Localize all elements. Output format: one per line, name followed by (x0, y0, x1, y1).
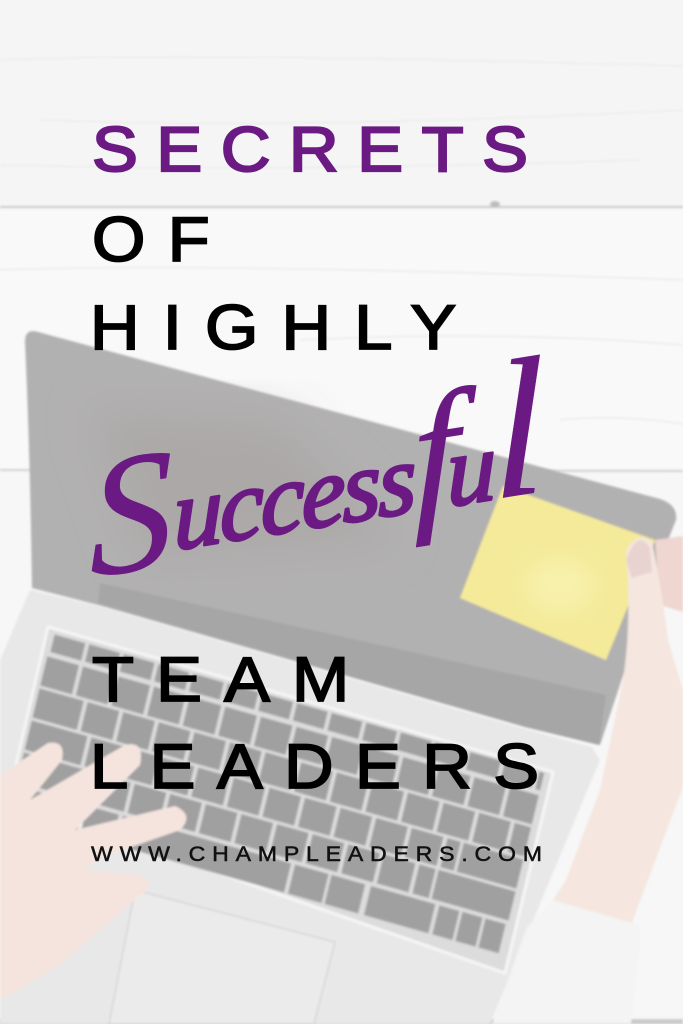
lid reflection (90, 410, 400, 560)
laptop lid (25, 331, 676, 745)
keyboard well (8, 627, 553, 973)
keyboard keys (12, 643, 542, 939)
heading: TEAM: TEAM (92, 644, 349, 714)
script word: Successful: S (88, 411, 175, 614)
script word: Successful: ucces (172, 427, 380, 572)
sticky note (460, 486, 655, 660)
hinge band (98, 583, 606, 745)
script word: Successful (87, 316, 547, 614)
laptop base (0, 590, 600, 1024)
left hand (0, 743, 186, 1000)
heading: LEADERS: LEADERS (90, 731, 539, 801)
script word: Successful: sful (377, 316, 547, 548)
right arm and thumb (553, 538, 683, 925)
right hand fingers behind note (655, 536, 683, 612)
heading: OF: OF (92, 204, 210, 274)
yellow glow on note (526, 559, 594, 611)
heading: HIGHLY: HIGHLY (90, 292, 456, 362)
thumbnail (626, 540, 652, 578)
website url: WWW.CHAMPLEADERS.COM (91, 842, 542, 866)
heading: SECRETS: SECRETS (92, 114, 528, 184)
trackpad (109, 890, 335, 1024)
sleeve (492, 900, 640, 1024)
photo: laptop and hands (0, 331, 683, 1024)
